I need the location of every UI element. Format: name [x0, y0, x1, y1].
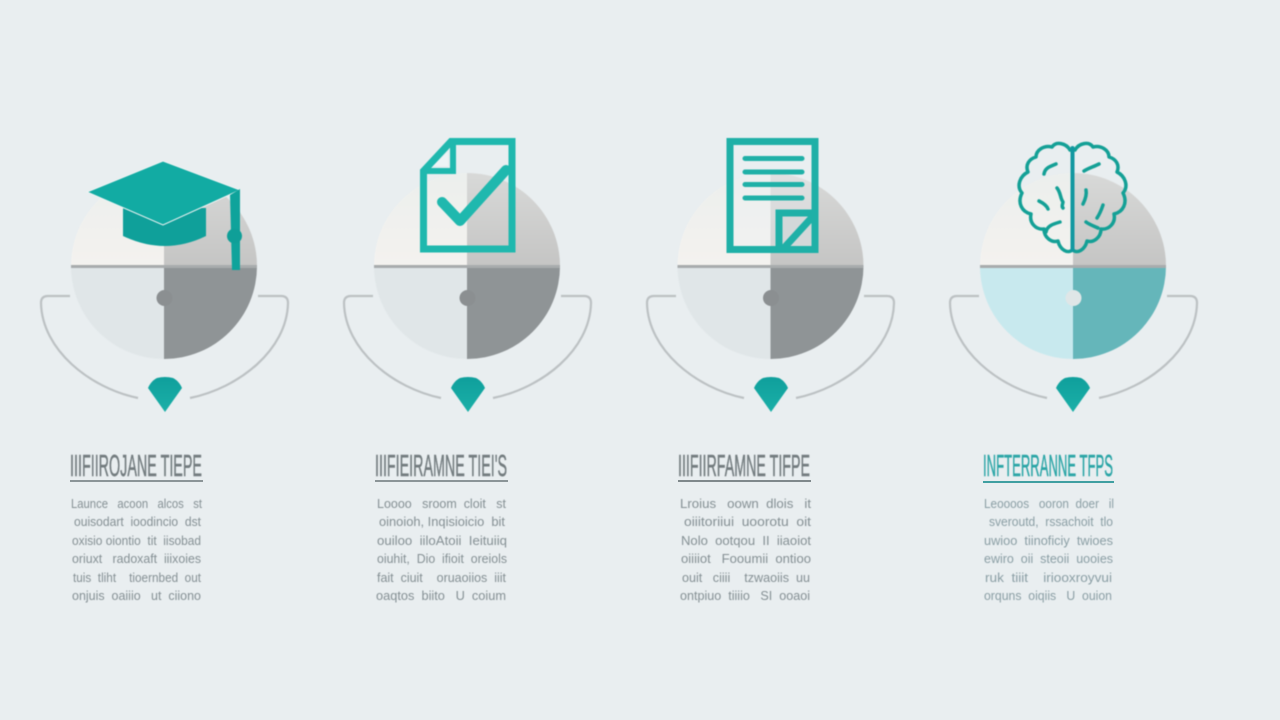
quartered circle 4: [980, 173, 1166, 359]
icon: brain: [1019, 143, 1126, 252]
cradle arc 2: [344, 296, 591, 398]
icon: diamond marker 1: [148, 377, 182, 412]
quartered circle 2: [374, 173, 560, 359]
body text 4: orquns oiqiis U ouion: [984, 588, 1112, 603]
body text 2: oiuhit, Dio ifioit oreiols: [377, 551, 507, 566]
panel: report column: [647, 142, 894, 603]
body text 1: oriuxt radoxaft iiixoies: [72, 551, 201, 566]
body text 3: oiiiiot Fooumii ontioo: [681, 551, 811, 566]
icon: diamond marker 3: [754, 377, 788, 412]
body text 1: [71, 496, 202, 603]
panel: graduation column: IIIFIIROJANE TIEPE: [70, 448, 202, 483]
body text 4: Leoooos ooron doer il: [984, 496, 1114, 511]
quartered circle 3: [678, 173, 864, 359]
body text 2: ouiloo iiloAtoii Ieituiiq: [377, 533, 507, 548]
panel: brain column: [950, 143, 1197, 603]
body text 3: Nolo ootqou II iiaoiot: [681, 533, 811, 548]
heading 1: [70, 448, 203, 483]
panel: report column: IIIFIIRFAMNE TIFPE: [678, 448, 810, 483]
body text 3: Lroius oown dlois it: [680, 496, 811, 511]
body text 2: oinoioh, Inqisioicio bit: [379, 514, 505, 529]
body text 1: onjuis oaiiio ut ciiono: [72, 588, 201, 603]
body text 1: ouisodart ioodincio dst: [74, 514, 201, 529]
icon: diamond marker 2: [451, 377, 485, 412]
body text 3: [680, 496, 811, 603]
icon: graduation cap: [87, 161, 242, 270]
body text 4: ewiro oii steoii uooies: [984, 551, 1113, 566]
body text 3: ouit ciiii tzwaoiis uu: [682, 570, 810, 585]
body text 4: [984, 496, 1114, 603]
heading 4: [983, 448, 1114, 483]
body text 2: fait ciuit oruaoiios iiit: [377, 570, 506, 585]
body text 4: sveroutd, rssachoit tlo: [989, 514, 1113, 529]
icon: checked document: [423, 141, 512, 249]
body text 2: [376, 496, 507, 603]
body text 4: uwioo tiinoficiy twioes: [984, 533, 1113, 548]
panel: checklist column: IIIFIEIRAMNE TIEI'S: [375, 448, 507, 483]
cradle arc 4: [950, 296, 1197, 398]
body text 3: oiiitoriiui uoorotu oit: [684, 514, 811, 529]
cradle arc 3: [647, 296, 894, 398]
body text 2: Loooo sroom cloit st: [377, 496, 506, 511]
icon: text document: [730, 142, 815, 250]
quartered circle 1: [71, 173, 257, 359]
heading 2: [375, 448, 508, 483]
panel: checklist column: [344, 141, 591, 603]
body text 2: oaqtos biito U coium: [376, 588, 506, 603]
panel: graduation column: [41, 161, 288, 603]
body text 3: ontpiuo tiiiio SI ooaoi: [680, 588, 810, 603]
body text 1: tuis tliht tioernbed out: [73, 570, 201, 585]
cradle arc 1: [41, 296, 288, 398]
icon: diamond marker 4: [1056, 377, 1090, 412]
body text 1: Launce acoon alcos st: [71, 496, 202, 511]
heading 3: [678, 448, 811, 483]
body text 1: oxisio oiontio tit iisobad: [72, 533, 201, 548]
body text 4: ruk tiiit iriooxroyvui: [985, 570, 1112, 585]
